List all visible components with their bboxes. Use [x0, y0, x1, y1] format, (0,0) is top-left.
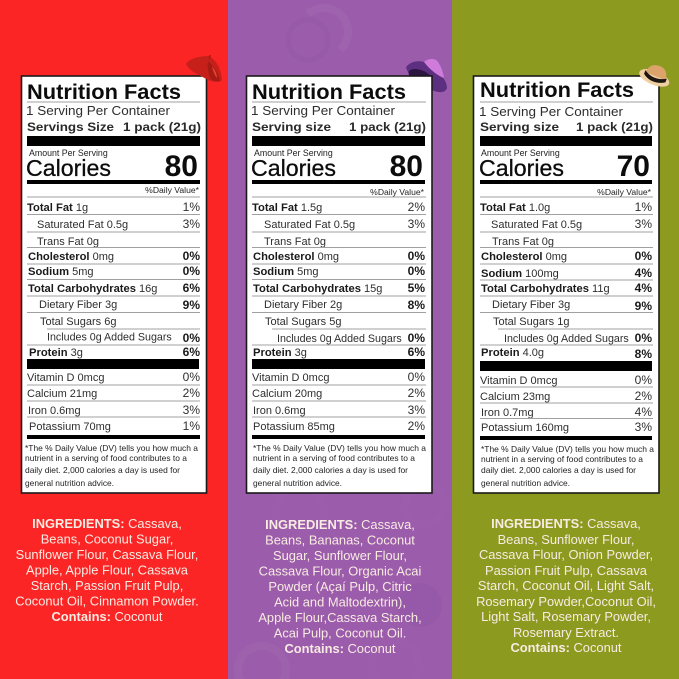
footnote: nutrient in a serving of food contributes to a [253, 453, 415, 463]
nutrient rows: 6% [408, 345, 425, 359]
servings [479, 105, 653, 134]
ingredients olive: Starch, Coconut Oil, Light Salt, [478, 578, 654, 593]
panel: nutrition facts purple: %Daily Value* [370, 187, 425, 197]
ingredients purple: Sugar, Sunflower Flour, [273, 548, 407, 563]
panel: red background [0, 0, 228, 679]
servings: 1 pack (21g) [349, 120, 426, 134]
ingredients purple [258, 517, 422, 656]
nutrient rows: Vitamin D 0mcg [252, 372, 329, 384]
nutrient rows: 3% [183, 217, 200, 231]
nutrient rows: 1% [183, 419, 200, 433]
calories: Calories [479, 155, 564, 181]
footnote: general nutrition advice. [481, 478, 570, 488]
nutrient rows: Calcium 23mg [480, 391, 550, 403]
nutrient rows: Total Carbohydrates 15g [253, 283, 382, 295]
ingredients olive: Rosemary Powder,Coconut Oil, [476, 594, 656, 609]
nutrient rows: Potassium 85mg [253, 421, 335, 433]
nutrient rows: 8% [408, 298, 425, 312]
icon: red beret [186, 55, 222, 82]
footnote: nutrient in a serving of food contributes to a [25, 453, 187, 463]
nutrient rows: 1% [635, 200, 652, 214]
calories [251, 148, 423, 183]
nutrient rows [480, 200, 653, 434]
ingredients purple: Cassava Flour, Organic Acai [259, 564, 421, 578]
calories [26, 148, 198, 183]
heading: Nutrition Facts [27, 80, 181, 104]
nutrient rows: 2% [635, 389, 652, 403]
nutrient rows: Total Sugars 1g [493, 316, 569, 328]
nutrient rows: Calcium 20mg [252, 388, 322, 400]
nutrient rows: Protein 4.0g [481, 347, 544, 359]
ingredients red: Coconut Oil, Cinnamon Powder. [15, 594, 199, 608]
ingredients red [15, 516, 199, 624]
nutrient rows: Cholesterol 0mg [481, 251, 567, 263]
nutrient rows: Includes 0g Added Sugars [277, 333, 402, 345]
ingredients purple: Beans, Bananas, Coconut [265, 532, 415, 548]
nutrient rows: Total Fat 1.0g [480, 202, 550, 214]
footnote [25, 443, 198, 488]
nutrient rows: Trans Fat 0g [37, 236, 99, 248]
ingredients purple: INGREDIENTS: Cassava, [265, 517, 415, 532]
ingredients olive: Cassava Flour, Onion Powder, [479, 547, 653, 562]
nutrient rows: Dietary Fiber 2g [264, 299, 342, 311]
servings: Serving size [252, 120, 331, 134]
nutrient rows: Iron 0.6mg [28, 405, 81, 417]
nutrient rows: Iron 0.6mg [253, 405, 306, 417]
nutrient rows: Total Sugars 6g [40, 316, 116, 328]
icon: purple hat [406, 59, 447, 92]
nutrient rows: 0% [183, 370, 200, 384]
nutrient rows: Potassium 160mg [481, 422, 569, 434]
nutrient rows: 3% [408, 403, 425, 417]
nutrient rows: Calcium 21mg [27, 388, 97, 400]
ingredients olive: Rosemary Extract. [513, 625, 619, 640]
calories: Calories [251, 155, 336, 181]
servings: 1 Serving Per Container [251, 104, 395, 118]
footnote: *The % Daily Value (DV) tells you how much a [481, 444, 654, 454]
servings: Servings Size [27, 120, 114, 134]
footnote: daily diet. 2,000 calories a day is used for [481, 465, 636, 475]
nutrient rows: Cholesterol 0mg [28, 251, 114, 263]
nutrient rows: 0% [635, 373, 652, 387]
nutrient rows: Saturated Fat 0.5g [491, 219, 582, 231]
nutrient rows: Includes 0g Added Sugars [47, 332, 172, 344]
footnote: general nutrition advice. [253, 478, 342, 488]
icon: straw hat [637, 60, 674, 90]
nutrient rows: Sodium 5mg [253, 266, 318, 278]
nutrient rows: 2% [408, 386, 425, 400]
servings: 1 Serving Per Container [479, 105, 623, 119]
nutrient rows [27, 200, 200, 433]
nutrient rows: 3% [183, 403, 200, 417]
nutrient rows: 9% [183, 298, 200, 312]
nutrient rows: Sodium 5mg [28, 266, 94, 278]
nutrient rows: 3% [635, 420, 652, 434]
panel: nutrition facts red [22, 76, 206, 493]
ingredients olive [476, 516, 656, 655]
calories: Amount Per Serving [29, 148, 108, 158]
servings: Serving size [480, 120, 559, 134]
servings [26, 104, 201, 134]
ingredients red: Starch, Passion Fruit Pulp, [31, 578, 183, 593]
nutrient rows: 4% [635, 266, 652, 280]
servings: 1 Serving Per Container [26, 104, 170, 118]
nutrient rows: 9% [635, 299, 652, 313]
nutrient rows: Saturated Fat 0.5g [264, 219, 355, 231]
footnote: *The % Daily Value (DV) tells you how much a [253, 443, 426, 453]
ingredients purple: Powder (Açaí Pulp, Citric [268, 579, 412, 594]
calories: Amount Per Serving [254, 148, 333, 158]
nutrient rows: Dietary Fiber 3g [492, 299, 570, 311]
footnote: nutrient in a serving of food contributes to a [481, 454, 643, 464]
servings [251, 104, 426, 134]
nutrient rows: Total Carbohydrates 16g [28, 283, 157, 295]
calories: Calories [26, 155, 111, 181]
nutrient rows [252, 200, 426, 433]
ingredients red: Apple, Apple Flour, Cassava [26, 562, 189, 578]
footnote [481, 444, 654, 488]
nutrient rows: 3% [408, 217, 425, 231]
footnote: *The % Daily Value (DV) tells you how much a [25, 443, 198, 453]
nutrient rows: 1% [183, 200, 200, 214]
nutrient rows: 0% [408, 249, 425, 263]
nutrient rows: Dietary Fiber 3g [39, 299, 117, 311]
nutrient rows: 5% [408, 281, 425, 295]
nutrient rows: 0% [183, 249, 200, 263]
ingredients olive: INGREDIENTS: Cassava, [491, 516, 641, 531]
nutrient rows: Total Carbohydrates 11g [481, 283, 610, 295]
nutrient rows: 6% [183, 345, 200, 359]
calories: 80 [390, 150, 423, 183]
nutrient rows: 2% [408, 200, 425, 214]
nutrient rows: 4% [635, 405, 652, 419]
ingredients purple: Apple Flour,Cassava Starch, [258, 610, 422, 625]
nutrient rows: 0% [635, 331, 652, 345]
heading: Nutrition Facts [480, 78, 634, 102]
nutrient rows: Vitamin D 0mcg [27, 372, 104, 384]
footnote: general nutrition advice. [25, 478, 114, 488]
nutrient rows: Total Sugars 5g [265, 316, 341, 328]
calories: 80 [165, 150, 198, 183]
nutrient rows: Includes 0g Added Sugars [504, 333, 629, 345]
panel: nutrition facts red: %Daily Value* [145, 185, 200, 195]
nutrient rows: 0% [183, 264, 200, 278]
ingredients purple: Acai Pulp, Coconut Oil. [274, 626, 406, 640]
nutrient rows: Protein 3g [29, 347, 83, 359]
ingredients purple: Acid and Maltodextrin), [274, 594, 406, 610]
nutrient rows: 3% [635, 217, 652, 231]
nutrient rows: 0% [183, 331, 200, 345]
ingredients red: Sunflower Flour, Cassava Flour, [16, 547, 198, 562]
nutrient rows: 2% [408, 419, 425, 433]
nutrient rows: Total Fat 1.5g [252, 202, 322, 214]
ingredients red: Contains: Coconut [51, 609, 163, 624]
nutrient rows: Iron 0.7mg [481, 407, 534, 419]
calories: Amount Per Serving [481, 148, 560, 158]
calories [479, 148, 650, 183]
nutrient rows: Trans Fat 0g [492, 236, 554, 248]
nutrient rows: 0% [635, 249, 652, 263]
servings: 1 pack (21g) [576, 120, 653, 134]
nutrient rows: Vitamin D 0mcg [480, 375, 557, 387]
ingredients red: Beans, Coconut Sugar, [41, 532, 173, 546]
ingredients olive: Light Salt, Rosemary Powder, [481, 609, 651, 624]
nutrient rows: Total Fat 1g [27, 202, 88, 214]
nutrient rows: Saturated Fat 0.5g [37, 219, 128, 231]
heading: Nutrition Facts [252, 80, 406, 104]
nutrient rows: Sodium 100mg [481, 268, 559, 280]
nutrient rows: Trans Fat 0g [264, 236, 326, 248]
ingredients olive: Passion Fruit Pulp, Cassava [485, 563, 648, 578]
servings: 1 pack (21g) [123, 120, 201, 134]
footnote: daily diet. 2,000 calories a day is used for [253, 465, 408, 475]
ingredients olive: Beans, Sunflower Flour, [498, 532, 634, 547]
nutrient rows: 4% [635, 281, 652, 295]
nutrient rows: Potassium 70mg [29, 421, 111, 433]
panel: nutrition facts olive: %Daily Value* [597, 187, 652, 197]
nutrient rows: 6% [183, 281, 200, 295]
ingredients purple: Contains: Coconut [284, 641, 396, 656]
calories: 70 [617, 150, 650, 183]
footnote: daily diet. 2,000 calories a day is used for [25, 465, 180, 475]
nutrient rows: Cholesterol 0mg [253, 251, 339, 263]
panel: olive background [452, 0, 679, 679]
nutrient rows: 8% [635, 347, 652, 361]
panel: nutrition facts olive [474, 76, 659, 493]
nutrient rows: 0% [408, 264, 425, 278]
nutrient rows: 0% [408, 331, 425, 345]
panel: purple background [228, 0, 453, 679]
ingredients olive: Contains: Coconut [510, 640, 622, 655]
ingredients red: INGREDIENTS: Cassava, [32, 516, 182, 531]
nutrient rows: 2% [183, 386, 200, 400]
panel: nutrition facts purple [246, 76, 432, 493]
nutrient rows: 0% [408, 370, 425, 384]
nutrient rows: Protein 3g [253, 347, 307, 359]
footnote [253, 443, 426, 488]
